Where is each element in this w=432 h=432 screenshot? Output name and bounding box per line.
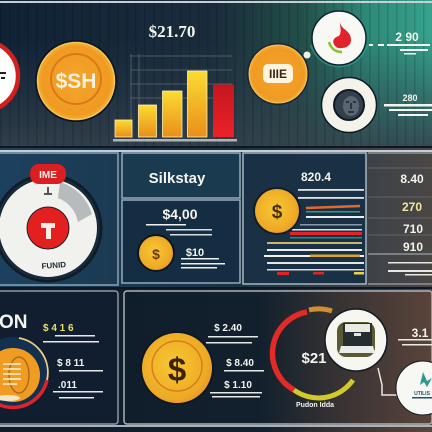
note two <box>224 358 264 372</box>
panel: right values: 8.40 <box>400 172 424 186</box>
note two <box>57 358 103 372</box>
panel: right values: 270 <box>402 200 422 214</box>
icon: large coin: $ <box>168 351 186 388</box>
note one <box>206 323 258 344</box>
panel: summary title <box>122 153 240 198</box>
icon: orange coin with label: IIIE <box>269 67 287 81</box>
note two: $ 8.40 <box>226 358 254 369</box>
panel: right values: 710 <box>403 222 423 236</box>
line rows <box>264 189 364 275</box>
bar chart <box>113 54 237 142</box>
text: top right notes: 280 <box>402 93 418 103</box>
note three: $ 1.10 <box>224 380 252 391</box>
note one: $ 4 1 6 <box>43 323 74 334</box>
panel: summary title: Silkstay <box>149 170 206 187</box>
panel: right values <box>368 153 432 284</box>
title: chart value: $21.70 <box>149 22 195 41</box>
panel: gauge <box>0 153 118 285</box>
icon: small yellow coin: $ <box>152 246 160 262</box>
arrow: connector <box>378 368 398 395</box>
icon: large orange coin <box>35 40 117 122</box>
panel: gauge: FUNID <box>41 260 67 271</box>
note one <box>43 323 99 342</box>
note two: $ 8 11 <box>57 358 85 369</box>
icon: flame circle <box>310 11 368 67</box>
panel: right values: 910 <box>403 240 423 254</box>
icon: large orange coin: $SH <box>56 70 96 93</box>
panel: line chart list <box>243 153 366 284</box>
chart heading: 820.4 <box>301 170 331 184</box>
panel: summary detail <box>122 200 240 283</box>
note three: .011 <box>58 380 77 391</box>
text: top right notes <box>369 30 432 116</box>
icon: large coin <box>140 331 214 405</box>
icon: plant circle <box>396 361 432 415</box>
panel: bottom left <box>0 291 118 424</box>
icon: yellow coin: $ <box>272 202 283 223</box>
icon: ringed coin <box>0 337 49 409</box>
gauge tag: IME <box>39 170 57 181</box>
icon: plant circle: UTILIS <box>414 391 431 397</box>
gauge centre dial <box>27 207 69 249</box>
panel: bottom main <box>124 291 432 424</box>
text: bottom right note: 3.1 <box>412 326 429 340</box>
note three <box>210 380 262 398</box>
summary note: $10 <box>186 247 204 259</box>
text: bottom right note <box>398 326 432 346</box>
donut caption: Pudon Idda <box>296 402 334 409</box>
icon: face circle <box>322 78 376 132</box>
donut value: $21 <box>301 350 327 367</box>
text: top right notes: 2 90 <box>395 30 419 44</box>
note one: $ 2.40 <box>214 323 242 334</box>
donut chart <box>272 309 353 398</box>
note three <box>53 380 103 398</box>
icon: red ring badge <box>0 41 18 111</box>
icon: laptop circle <box>325 309 387 371</box>
summary amount: $4,00 <box>162 206 198 222</box>
icon: orange coin with label <box>247 43 310 105</box>
